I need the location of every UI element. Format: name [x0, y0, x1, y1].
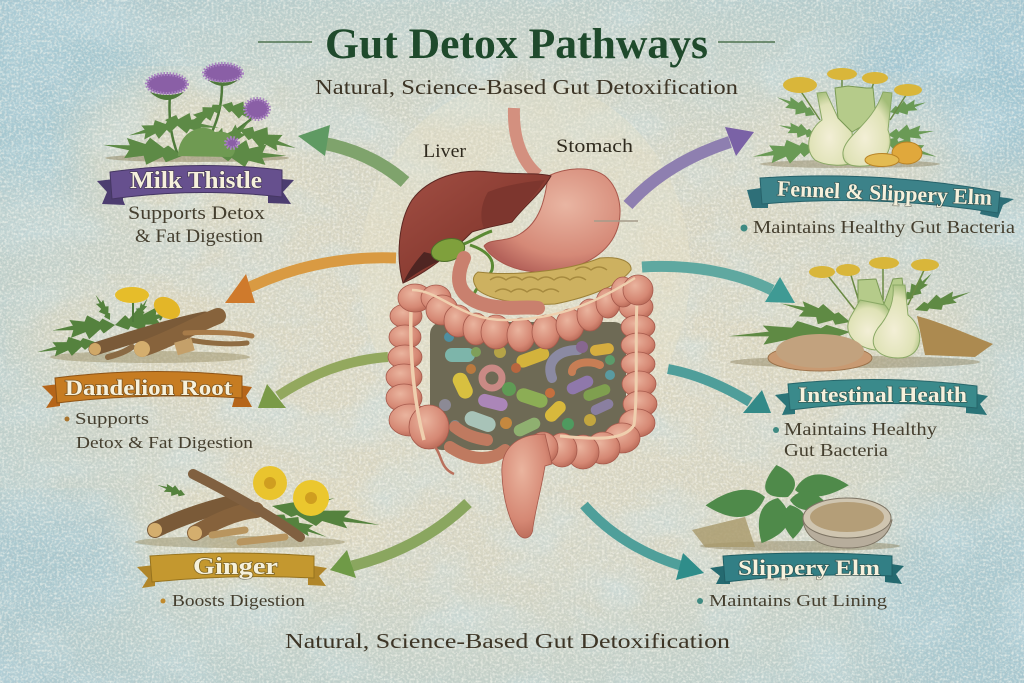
ribbon: dandelion root: Dandelion Root: [65, 375, 233, 400]
ribbon: slippery elm: Slippery Elm: [738, 555, 880, 580]
ribbon: ginger: [137, 553, 327, 588]
milk thistle text: Supports Detox: [128, 203, 266, 224]
ribbon: dandelion root: [42, 371, 252, 408]
anatomy illustration: [386, 108, 657, 538]
arrow: to milk thistle: [298, 125, 405, 182]
transverse band: [412, 278, 635, 320]
icon: milk thistle plant: [101, 64, 299, 169]
ascending colon: [386, 304, 449, 449]
ribbon: intestinal health: Intestinal Health: [798, 382, 967, 407]
liver: [399, 171, 551, 283]
pointer line: [594, 220, 638, 222]
dandelion text: Detox & Fat Digestion: [76, 433, 254, 452]
arrow: lower left: [330, 503, 468, 578]
bile ducts: [448, 231, 493, 294]
esophagus: [514, 108, 538, 175]
arrow: to fennel: [628, 127, 754, 205]
dandelion text: Supports: [75, 409, 149, 428]
transverse colon: [398, 275, 653, 352]
gut contents backdrop: [430, 322, 626, 450]
bottom caption: Natural, Science-Based Gut Detoxification: [285, 629, 731, 653]
gallbladder: [429, 235, 467, 265]
ribbon: milk thistle: [97, 165, 294, 205]
icon: mint and bowl: [692, 461, 900, 551]
ginger text: Boosts Digestion: [172, 591, 306, 610]
arrow: to slippery elm: [584, 505, 704, 580]
icon: ginger roots: [135, 466, 382, 548]
icon: fennel, bowl and roots: [728, 257, 993, 371]
subtitle: Natural, Science-Based Gut Detoxification: [315, 75, 739, 99]
ribbon: fennel and slippery elm: Fennel & Slippery Elm: [777, 176, 993, 210]
icon: fennel bulbs: [751, 68, 940, 169]
ascending band: [411, 310, 424, 440]
organ labels: Stomach: [556, 136, 634, 157]
fennel text: Maintains Healthy Gut Bacteria: [753, 217, 1015, 237]
arrow: to intestinal health: [668, 369, 771, 413]
title: Gut Detox Pathways: [325, 21, 708, 68]
icon: dandelion roots: [35, 287, 252, 363]
intestinal health text: Maintains Healthy: [784, 419, 937, 439]
ribbon: milk thistle: Milk Thistle: [130, 168, 262, 194]
appendix: [435, 447, 454, 474]
ribbon: ginger: Ginger: [193, 554, 278, 580]
microbiome: [439, 332, 615, 438]
descending band: [560, 300, 637, 438]
arrow: to dandelion root: [225, 258, 396, 303]
descending colon: [528, 294, 657, 469]
intestinal health text: Gut Bacteria: [784, 440, 888, 460]
sausage loops: [450, 427, 505, 458]
pancreas texture: [490, 267, 607, 292]
dandelion text: [64, 409, 254, 452]
pancreas: [474, 258, 631, 304]
liver underside: [403, 252, 448, 283]
ribbon: intestinal health: [775, 379, 988, 415]
arrow: to ginger: [258, 357, 388, 408]
liver lobe: [481, 180, 545, 228]
milk thistle text: [128, 203, 266, 247]
arrow: to intestinal herbs: [642, 266, 795, 303]
duodenum: [459, 258, 538, 308]
milk thistle text: & Fat Digestion: [135, 226, 264, 247]
ribbon: slippery elm: [710, 553, 904, 584]
organ labels: [423, 136, 634, 162]
slippery elm text: Maintains Gut Lining: [709, 591, 888, 610]
organ labels: Liver: [423, 141, 467, 162]
rectum: [502, 434, 552, 538]
intestinal health text: [773, 419, 937, 460]
ribbon: fennel and slippery elm: [747, 176, 1014, 218]
stomach: [484, 169, 620, 272]
